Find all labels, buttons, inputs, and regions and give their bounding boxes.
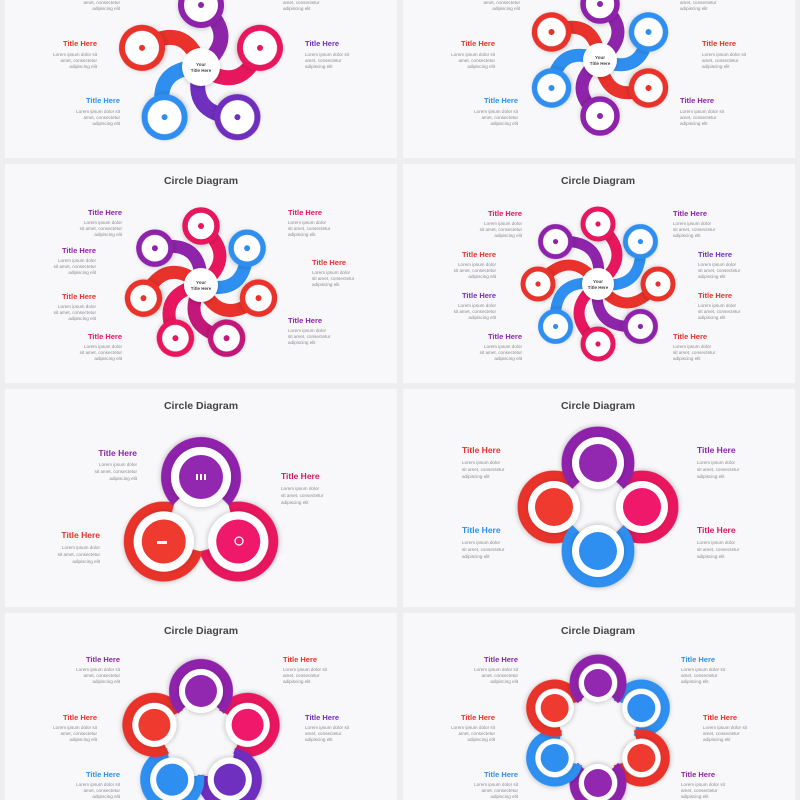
label: purple right: amet, consectetur <box>305 731 342 736</box>
label: pink: sit amet, consectetur <box>697 547 740 552</box>
label: left 4 pink: Lorem ipsum dolor <box>84 344 122 349</box>
text block: top-right cut: amet, consectetur <box>680 0 717 5</box>
heading: Circle Diagram <box>561 400 635 412</box>
label: right purple: amet, consectetur <box>680 115 717 120</box>
text block: top-right cut: amet, consectetur <box>283 0 320 5</box>
swirl diagram: Your <box>595 55 605 60</box>
label: left 2: adipiscing elit <box>468 274 497 279</box>
label: right 3: adipiscing elit <box>698 315 726 320</box>
label: blue right: adipiscing elit <box>681 679 709 684</box>
label: right 3 purple: adipiscing elit <box>288 340 316 345</box>
label: purple left: amet, consectetur <box>481 673 518 678</box>
label: blue right: Title Here <box>681 655 715 664</box>
label: pink: Title Here <box>281 471 320 481</box>
label: left red <box>53 39 98 69</box>
label: left 2: sit amet, consectetur <box>454 268 496 273</box>
text block: top-right cut: adipiscing elit <box>680 6 708 11</box>
label: right 2 red: sit amet, consectetur <box>312 276 355 281</box>
label: left blue <box>474 96 519 126</box>
swirl diagram <box>117 0 285 145</box>
label: left 1: Title Here <box>488 209 522 218</box>
label: red right: adipiscing elit <box>283 679 311 684</box>
label: right 2 red: adipiscing elit <box>312 282 340 287</box>
label: right 2: Title Here <box>698 250 732 259</box>
label: right 2 red <box>312 258 355 287</box>
label: red <box>58 530 101 564</box>
swirl diagram: Your <box>196 280 206 285</box>
label: left red: Lorem ipsum dolor sit <box>451 52 496 57</box>
label: right 4 <box>673 332 716 361</box>
label: left red: amet, consectetur <box>60 58 97 63</box>
label: left 1 purple: adipiscing elit <box>94 232 123 237</box>
swirl diagram: Your <box>196 62 206 67</box>
label: blue <box>462 525 505 559</box>
circles diagram <box>96 428 306 609</box>
label: right 4: Lorem ipsum dolor <box>673 344 712 349</box>
label: right purple: adipiscing elit <box>305 64 333 69</box>
label: right red <box>702 39 747 69</box>
label: purple right: adipiscing elit <box>681 794 709 799</box>
label: blue right: Lorem ipsum dolor sit <box>681 667 726 672</box>
label: pink: adipiscing elit <box>281 500 309 505</box>
label: red: sit amet, consectetur <box>462 467 505 472</box>
label: left 2 <box>454 250 497 279</box>
label: right 3: sit amet, consectetur <box>698 309 741 314</box>
label: left blue: adipiscing elit <box>92 121 121 126</box>
label: right 2 red: Title Here <box>312 258 346 267</box>
label: left blue: adipiscing elit <box>490 121 519 126</box>
label: purple: Title Here <box>697 445 736 455</box>
label: left 1 purple: Lorem ipsum dolor <box>84 220 122 225</box>
label: right 1 pink <box>288 208 331 237</box>
text block: top-right cut: adipiscing elit <box>283 6 311 11</box>
label: purple: Lorem ipsum dolor sit <box>76 667 121 672</box>
label: right 3 purple <box>288 316 331 345</box>
label: purple: Lorem ipsum dolor <box>697 460 736 465</box>
label: blue left: Title Here <box>484 770 518 779</box>
text block: top-left cut: adipiscing elit <box>92 6 121 11</box>
label: left 2 purple: Title Here <box>62 246 96 255</box>
label: left 2 purple: sit amet, consectetur <box>54 264 96 269</box>
swirl diagram: Title Here <box>191 68 212 73</box>
label: blue: adipiscing elit <box>92 794 121 799</box>
panel: slide 2 six-petal swirl <box>451 0 747 133</box>
label: red: Lorem ipsum dolor <box>462 460 501 465</box>
label: right 2 <box>698 250 741 279</box>
ring diagram <box>508 649 688 800</box>
label: red: adipiscing elit <box>72 559 101 564</box>
label: right 1 pink: Lorem ipsum dolor <box>288 220 327 225</box>
label: purple left: adipiscing elit <box>490 679 519 684</box>
label: left 3 red: Title Here <box>62 292 96 301</box>
label: purple right: adipiscing elit <box>305 737 333 742</box>
label: blue: Title Here <box>462 525 501 535</box>
label: red right: amet, consectetur <box>703 731 740 736</box>
label: left 4: Lorem ipsum dolor <box>484 344 522 349</box>
label: red <box>462 445 505 479</box>
label: purple right: Lorem ipsum dolor sit <box>681 782 726 787</box>
label: red right <box>703 713 748 742</box>
label: left 4 pink <box>80 332 123 361</box>
heading: Circle Diagram <box>164 625 238 637</box>
label: blue: amet, consectetur <box>83 788 120 793</box>
label: right purple <box>680 96 725 126</box>
label: red right: Lorem ipsum dolor sit <box>703 725 748 730</box>
label: red: Lorem ipsum dolor sit <box>53 725 98 730</box>
text block: top-left cut: amet, consectetur <box>483 0 520 5</box>
label: left red: adipiscing elit <box>467 64 496 69</box>
label: pink: Title Here <box>697 525 736 535</box>
label: right 1 pink: adipiscing elit <box>288 232 316 237</box>
text block: top-left cut <box>483 0 521 11</box>
label: purple right <box>681 770 726 799</box>
label: left 4: sit amet, consectetur <box>480 350 522 355</box>
label: left 3: adipiscing elit <box>468 315 497 320</box>
label: red left <box>451 713 496 742</box>
text block: top-left cut: amet, consectetur <box>83 0 120 5</box>
panel: slide 7 five-node ring <box>53 625 350 800</box>
label: right 1: Title Here <box>673 209 707 218</box>
label: right 3: Title Here <box>698 291 732 300</box>
label: right 3 purple: sit amet, consectetur <box>288 334 331 339</box>
label: left 2: Lorem ipsum dolor <box>458 262 496 267</box>
label: red: Lorem ipsum dolor <box>62 545 100 550</box>
label: blue: Lorem ipsum dolor <box>462 540 501 545</box>
label: right purple: Lorem ipsum dolor sit <box>305 52 350 57</box>
label: left red: Title Here <box>63 39 97 48</box>
label: purple left <box>474 655 519 684</box>
label: left blue: Title Here <box>484 96 518 105</box>
label: purple right: Title Here <box>681 770 715 779</box>
label: right purple <box>305 39 350 69</box>
label: blue left: adipiscing elit <box>490 794 519 799</box>
label: purple left: Lorem ipsum dolor sit <box>474 667 519 672</box>
label: pink <box>281 471 324 505</box>
swirl diagram <box>528 0 672 133</box>
label: left blue <box>76 96 121 126</box>
label: left 1 <box>480 209 523 238</box>
label: blue right <box>681 655 726 684</box>
label: blue: Title Here <box>86 770 120 779</box>
label: right 3: Lorem ipsum dolor <box>698 303 737 308</box>
label: pink: Lorem ipsum dolor <box>697 540 736 545</box>
label: purple: sit amet, consectetur <box>95 469 137 474</box>
panel: slide 1 five-petal swirl <box>53 0 350 145</box>
label: right 2: Lorem ipsum dolor <box>698 262 737 267</box>
label: left red: amet, consectetur <box>458 58 495 63</box>
label: right purple: Title Here <box>305 39 339 48</box>
label: purple: adipiscing elit <box>697 474 725 479</box>
label: right 4: adipiscing elit <box>673 356 701 361</box>
label: purple: sit amet, consectetur <box>697 467 740 472</box>
label: blue left: Lorem ipsum dolor sit <box>474 782 519 787</box>
label: right purple: Title Here <box>680 96 714 105</box>
label: left red: Lorem ipsum dolor sit <box>53 52 98 57</box>
label: red right: Title Here <box>703 713 737 722</box>
panel: slide 6 four circles <box>462 400 740 595</box>
label: right 2: adipiscing elit <box>698 274 726 279</box>
label: pink <box>697 525 740 559</box>
label: left 3 red: sit amet, consectetur <box>54 310 96 315</box>
label: left 2: Title Here <box>462 250 496 259</box>
label: blue right: amet, consectetur <box>681 673 718 678</box>
panel: slide 8 six-node ring <box>451 625 748 800</box>
label: purple: adipiscing elit <box>92 679 121 684</box>
label: left blue: amet, consectetur <box>481 115 518 120</box>
label: left 4: adipiscing elit <box>494 356 523 361</box>
label: red right: adipiscing elit <box>703 737 731 742</box>
label: purple <box>76 655 121 684</box>
label: left 2 purple: Lorem ipsum dolor <box>58 258 96 263</box>
swirl diagram <box>523 209 673 359</box>
label: blue left <box>474 770 519 799</box>
label: right purple: adipiscing elit <box>680 121 708 126</box>
label: pink: sit amet, consectetur <box>281 493 324 498</box>
label: blue: sit amet, consectetur <box>462 547 505 552</box>
label: left 1 purple <box>80 208 123 237</box>
label: right red: Lorem ipsum dolor sit <box>702 52 747 57</box>
label: left blue: Lorem ipsum dolor sit <box>76 109 121 114</box>
label: purple: Title Here <box>86 655 120 664</box>
label: left 2 purple: adipiscing elit <box>68 270 97 275</box>
label: right 1: Lorem ipsum dolor <box>673 221 712 226</box>
label: purple: amet, consectetur <box>83 673 120 678</box>
swirl diagram <box>124 210 278 360</box>
label: right 1 <box>673 209 716 238</box>
ring diagram <box>106 653 296 800</box>
label: blue <box>76 770 121 799</box>
panel: slide 4 eight-petal swirl <box>454 175 741 361</box>
label: right 3 purple: Lorem ipsum dolor <box>288 328 327 333</box>
label: left 3: Lorem ipsum dolor <box>458 303 496 308</box>
label: purple: adipiscing elit <box>109 476 138 481</box>
swirl diagram: Title Here <box>588 285 609 290</box>
label: pink: adipiscing elit <box>697 554 725 559</box>
label: left 1: adipiscing elit <box>494 233 523 238</box>
label: left 3: sit amet, consectetur <box>454 309 496 314</box>
label: purple right: Lorem ipsum dolor sit <box>305 725 350 730</box>
text block: top-right cut <box>680 0 717 11</box>
text block: top-left cut <box>83 0 121 11</box>
label: left 4 <box>480 332 523 361</box>
label: right 4: Title Here <box>673 332 707 341</box>
label: left 4 pink: Title Here <box>88 332 122 341</box>
label: purple <box>697 445 740 479</box>
label: left red: adipiscing elit <box>69 64 98 69</box>
label: red right: Lorem ipsum dolor sit <box>283 667 328 672</box>
text block: top-right cut <box>283 0 320 11</box>
label: left 3 red <box>54 292 97 321</box>
label: left 3 <box>454 291 497 320</box>
label: blue: adipiscing elit <box>462 554 490 559</box>
label: purple right: Title Here <box>305 713 339 722</box>
heading: Circle Diagram <box>164 175 238 187</box>
label: right 3 <box>698 291 741 320</box>
label: right 1: sit amet, consectetur <box>673 227 716 232</box>
label: red right: Title Here <box>283 655 317 664</box>
label: left 3 red: Lorem ipsum dolor <box>58 304 96 309</box>
label: right 4: sit amet, consectetur <box>673 350 716 355</box>
label: red right: amet, consectetur <box>283 673 320 678</box>
label: pink: Lorem ipsum dolor <box>281 486 320 491</box>
label: blue left: amet, consectetur <box>481 788 518 793</box>
label: left blue: amet, consectetur <box>83 115 120 120</box>
label: right 1 pink: sit amet, consectetur <box>288 226 331 231</box>
label: left 4: Title Here <box>488 332 522 341</box>
label: red: adipiscing elit <box>462 474 490 479</box>
label: red: adipiscing elit <box>69 737 98 742</box>
label: red left: Title Here <box>461 713 495 722</box>
label: right 3 purple: Title Here <box>288 316 322 325</box>
label: purple: Title Here <box>98 448 137 458</box>
label: red: sit amet, consectetur <box>58 552 100 557</box>
label: right 2: sit amet, consectetur <box>698 268 741 273</box>
label: left 1: Lorem ipsum dolor <box>484 221 522 226</box>
label: left blue: Lorem ipsum dolor sit <box>474 109 519 114</box>
heading: Circle Diagram <box>561 625 635 637</box>
label: right purple: amet, consectetur <box>305 58 342 63</box>
label: left blue: Title Here <box>86 96 120 105</box>
label: purple: Lorem ipsum dolor <box>99 462 137 467</box>
heading: Circle Diagram <box>164 400 238 412</box>
swirl diagram: Your <box>593 279 603 284</box>
label: left red: Title Here <box>461 39 495 48</box>
label: left 1 purple: sit amet, consectetur <box>80 226 122 231</box>
circles diagram <box>510 419 686 595</box>
label: red: Title Here <box>462 445 501 455</box>
swirl diagram: Title Here <box>590 61 611 66</box>
label: right red: amet, consectetur <box>702 58 739 63</box>
label: red: Title Here <box>61 530 100 540</box>
label: right red: Title Here <box>702 39 736 48</box>
label: red <box>53 713 98 742</box>
heading: Circle Diagram <box>561 175 635 187</box>
label: red: Title Here <box>63 713 97 722</box>
label: red right <box>283 655 328 684</box>
label: left red <box>451 39 496 69</box>
label: purple right <box>305 713 350 742</box>
label: left 4 pink: adipiscing elit <box>94 356 123 361</box>
label: right 2 red: Lorem ipsum dolor <box>312 270 351 275</box>
label: right red: adipiscing elit <box>702 64 730 69</box>
panel: slide 5 three circles <box>58 400 324 609</box>
label: right 1 pink: Title Here <box>288 208 322 217</box>
label: right purple: Lorem ipsum dolor sit <box>680 109 725 114</box>
icons <box>157 474 243 545</box>
text block: top-left cut: adipiscing elit <box>492 6 521 11</box>
label: purple right: amet, consectetur <box>681 788 718 793</box>
label: red left: Lorem ipsum dolor sit <box>451 725 496 730</box>
panel: slide 3 seven-petal swirl <box>54 175 355 361</box>
label: red: amet, consectetur <box>60 731 97 736</box>
label: left 3: Title Here <box>462 291 496 300</box>
label: left 2 purple <box>54 246 97 275</box>
label: right 1: adipiscing elit <box>673 233 701 238</box>
label: red left: amet, consectetur <box>458 731 495 736</box>
label: left 4 pink: sit amet, consectetur <box>80 350 122 355</box>
label: left 1 purple: Title Here <box>88 208 122 217</box>
label: red left: adipiscing elit <box>467 737 496 742</box>
swirl diagram: Title Here <box>191 286 212 291</box>
label: left 3 red: adipiscing elit <box>68 316 97 321</box>
label: purple left: Title Here <box>484 655 518 664</box>
label: left 1: sit amet, consectetur <box>480 227 522 232</box>
label: purple <box>95 448 138 481</box>
label: blue: Lorem ipsum dolor sit <box>76 782 121 787</box>
